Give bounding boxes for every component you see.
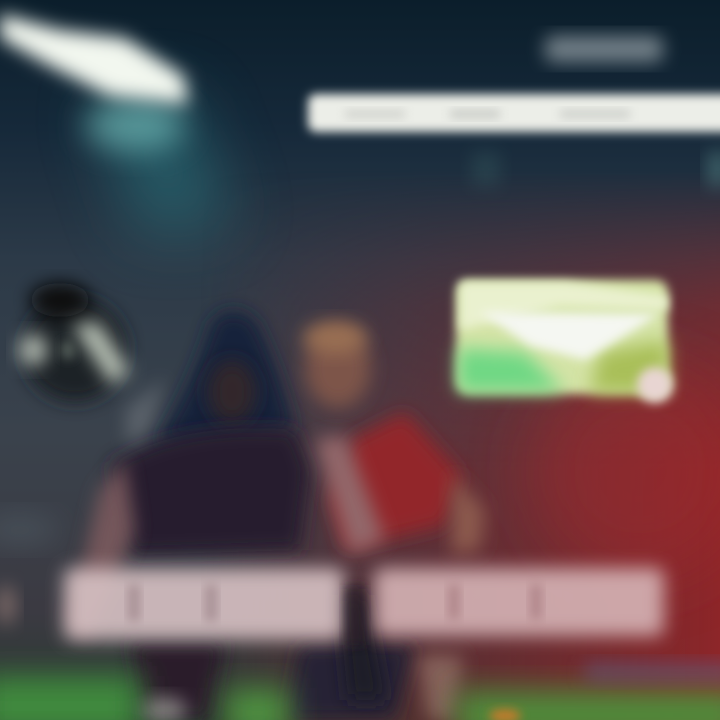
floodlight beam	[0, 14, 235, 235]
grass pitch	[0, 662, 720, 720]
football	[18, 283, 130, 402]
large title band (illegible)	[64, 568, 664, 645]
player right: red shirt	[285, 322, 485, 720]
green logo panel	[456, 280, 673, 403]
main headline band (illegible)	[308, 94, 720, 132]
top small heading (illegible)	[545, 36, 663, 62]
left crowd glow	[0, 516, 60, 625]
small teal marks	[472, 152, 720, 186]
player left: hooded figure	[70, 311, 310, 720]
